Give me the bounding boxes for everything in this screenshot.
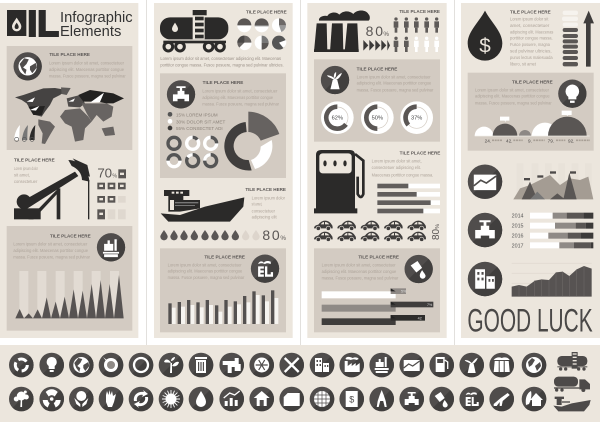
legend: 55% CONSECTET ADI [176, 126, 223, 132]
text block: Lorem ipsum dolor sit amet, consectetuer [322, 263, 396, 268]
text block: consectetuer adipiscing elit. [372, 165, 421, 170]
text block: purus lectus malesuada [510, 55, 553, 60]
chart: year bars: 2014 [512, 214, 524, 220]
text block: massa. Fusce posuere, magna sed pulvinar [49, 73, 126, 78]
text block: adipiscing elit. Maecenas [510, 29, 554, 34]
logo: OIL: IL [27, 3, 59, 44]
chart: coin stack [562, 11, 578, 66]
chart: hills: 92. [568, 138, 574, 143]
text block [49, 60, 126, 78]
title: Elements [60, 23, 121, 40]
text block [202, 89, 279, 107]
heading: TILE PLACE HERE [357, 66, 397, 71]
illustration: fuel pump [314, 150, 363, 213]
chart: cars [314, 221, 426, 241]
icon: snowflake [249, 353, 274, 377]
stat: 80%: 80 [366, 23, 383, 39]
icon: pipe [219, 353, 244, 377]
icon: plant [159, 353, 183, 377]
icon: oil rig [97, 233, 125, 261]
icon: light bulb [558, 80, 586, 108]
text block [475, 87, 552, 105]
text block: adipiscing elit. Maecenas porttitor congue [13, 248, 88, 253]
chart: year bars: 2017 [512, 243, 524, 249]
text block: Lorem ipsum dolor sit amet, consectetuer [475, 87, 549, 92]
icon: trash [189, 353, 213, 377]
text block: Lorem ipsum dolor sit amet, consectetuer [168, 262, 242, 267]
icon: earth [14, 52, 42, 80]
icon: recycle [9, 353, 34, 377]
chart: year bars: 2015 [512, 224, 524, 230]
heading: TILE PLACE HERE [400, 150, 440, 155]
legend: 30% DOLOR SIT AMET [176, 119, 225, 125]
text block: Lorem ipsum dolor sit amet, consectetuer adipiscing elit. Maecenas [160, 56, 282, 61]
icon: bars [219, 387, 244, 411]
heading: TILE PLACE HERE [358, 255, 399, 260]
stat: 70% barrels: 70 [97, 166, 112, 181]
panel: triangle chart [7, 226, 132, 331]
icon: tools [279, 353, 304, 377]
icon: house leaves [522, 387, 546, 411]
panel: ship section [160, 187, 286, 332]
text block: massa. Fusce posuere, magna sed pulvinar [322, 275, 399, 280]
icon: radiation [39, 387, 64, 411]
arrow: up [583, 11, 594, 67]
icon: flower [9, 387, 34, 411]
text block: Lorem ipsum dolor sit amet, [372, 159, 422, 164]
text block: porttitor congue massa. Fusce posuere, magna sed pulvinar ultricies. [160, 62, 284, 67]
ring: 37%: 37% [411, 116, 422, 122]
icon: fuel pump [429, 353, 454, 377]
chart: bars with flags: 42 [418, 316, 422, 320]
icon: earth [69, 353, 94, 377]
text block: massa. Fusce posuere, magna sed pulvinar [202, 102, 279, 107]
icon: oil can [429, 387, 454, 411]
icon: house [249, 387, 274, 411]
icon: bulb [39, 353, 64, 377]
icon: valve [399, 387, 424, 411]
text block: adipiscing elit. Maecenas porttitor congue [49, 67, 124, 72]
text block [160, 56, 284, 67]
stat: 80% vertical: 80% [431, 224, 442, 240]
chart: hills: 42. [506, 138, 512, 143]
heading: TILE PLACE HERE [50, 234, 91, 239]
panel: column 2 [154, 3, 293, 338]
icon: derrick [369, 387, 394, 411]
icon: hand [99, 387, 123, 411]
text block [168, 262, 245, 280]
icon: valve [167, 80, 195, 108]
icon: folder chart [468, 164, 502, 199]
chart: small donuts [168, 137, 217, 167]
illustration: pump jack [14, 158, 90, 219]
panel: column 3 lower [314, 184, 442, 332]
heading + text: pump jack: consectetuer [14, 179, 38, 184]
icon: oil rig [369, 353, 394, 377]
stat: 80%: % [383, 31, 389, 38]
chart: triangles [15, 271, 124, 318]
chart: people [394, 17, 439, 52]
text block: consectetuer [252, 208, 275, 213]
icon: sun [159, 387, 183, 411]
icon: buildings [468, 262, 502, 296]
chart: hills: 9. [528, 138, 532, 143]
icon: tree [459, 353, 484, 377]
panel: bar chart [160, 248, 286, 332]
text block: adipiscing elit. Maecenas porttitor congue [475, 94, 550, 99]
heading: TILE PLACE HERE [512, 79, 553, 84]
text block: adipiscing elit. Maecenas porttitor congue [168, 269, 243, 274]
icon: hands globe [69, 387, 94, 411]
panel: ring charts [314, 59, 440, 142]
legend [168, 112, 225, 132]
text block: massa. Fusce posuere, magna sed pulvinar [13, 254, 90, 259]
text block: adipiscing elit. Maecenas porttitor congue [322, 269, 397, 274]
icon: valve [468, 213, 502, 247]
illustration: tanker ship [161, 190, 244, 222]
icon: globe grid [310, 387, 334, 411]
heading: TILE PLACE HERE [49, 52, 90, 57]
text block [510, 17, 554, 67]
icon: factory [339, 353, 364, 377]
heading + text: pump jack: sit amet, [14, 172, 30, 177]
chart: year bars: 2016 [512, 234, 524, 240]
chart: hills [475, 111, 590, 143]
logo: OIL [7, 3, 59, 44]
icon: factory letters [459, 387, 484, 411]
panel: world map [7, 46, 132, 150]
panel: hill chart [468, 73, 594, 151]
heading + text: pump jack [14, 158, 55, 184]
panel: column 4 [461, 3, 600, 338]
illustration: tank wagon [160, 10, 228, 51]
text block: porttitor congue massa. [510, 36, 553, 41]
text block: Lorem ipsum dolor sit amet, consectetuer [49, 60, 124, 65]
icon: tank wagon [557, 352, 587, 371]
heading: TILE PLACE HERE [204, 255, 245, 260]
icon: sync [129, 387, 153, 411]
icon: can [279, 387, 304, 411]
heading: TILE PLACE HERE [246, 9, 287, 14]
chart: large donut [224, 112, 279, 171]
icon: buildings [310, 353, 334, 377]
text block: Fusce posuere, magna [510, 42, 550, 47]
icon: folder chart [399, 353, 424, 377]
ring: 62%: 62% [332, 116, 343, 122]
title [60, 9, 133, 40]
text block: massa. Fusce posuere, magna sed pulvinar [357, 87, 434, 92]
icon: barrel [339, 387, 364, 411]
text block: sit amet, [252, 202, 262, 207]
icon: ring [129, 353, 153, 377]
text block [357, 74, 434, 92]
text block: Lorem ipsum dolor sit [510, 17, 549, 22]
chart: paired bars [168, 290, 278, 324]
chart: world map [14, 87, 124, 144]
text block: amet, consectetuer [510, 23, 550, 28]
icon: gauge [99, 353, 123, 377]
icon: dollar drop: $ [479, 34, 491, 57]
stat: drops 80% [160, 227, 286, 243]
chart: six pies [237, 18, 286, 50]
legend: 15% LOREM IPSUM [176, 112, 218, 118]
text block: Lorem ipsum dolor [252, 195, 285, 200]
text block: Lorem ipsum dolor sit amet, consectetuer [202, 89, 278, 94]
chart: horizontal bars [377, 184, 440, 213]
text block [372, 159, 433, 177]
text block: Maecenas porttitor congue massa. [372, 172, 433, 177]
icon: globe pin [522, 353, 546, 377]
text block [13, 242, 90, 259]
heading: TILE PLACE HERE [399, 9, 440, 14]
title: Infographic [60, 9, 133, 26]
text block: sed pulvinar ultricies, [510, 49, 552, 54]
text block: adipiscing elit. Maecenas porttitor congue [357, 81, 432, 86]
text block: adipiscing elit. Maecenas porttitor congue [202, 95, 273, 100]
icon: pump jack [489, 387, 514, 411]
heading: TILE PLACE HERE [203, 80, 243, 85]
text block: Lorem ipsum dolor sit amet, consectetuer [357, 74, 431, 79]
heading + text: pump jack: TILE PLACE HERE [14, 158, 55, 163]
icon: dollar drop [468, 11, 502, 61]
panel: column 4 lower [467, 163, 593, 339]
stat: drops 80%: % [280, 235, 286, 242]
ring: 50%: 50% [372, 116, 383, 122]
panel: bottom icon strip [0, 345, 600, 422]
heading: TILE PLACE HERE [245, 187, 286, 192]
icon: factory letters [251, 255, 279, 283]
text block: Lorem ipsum dolor sit amet, consectetuer [13, 242, 88, 247]
chart: mountains [513, 163, 593, 199]
chart: year bars [512, 213, 593, 249]
text block: massa. Fusce posuere, magna sed pulvinar [168, 275, 245, 280]
text block: libero, sit amet [510, 62, 537, 67]
icon: drop [189, 387, 213, 411]
icon: truck [554, 377, 590, 392]
icon: barrel: $ [349, 394, 354, 404]
chart: hills: 24. [485, 138, 491, 143]
chart: bars with flags: 7% [427, 303, 433, 307]
stat: drops 80%: 80 [262, 227, 280, 243]
stat: 70% barrels: % [112, 174, 117, 180]
icon: oil can [405, 255, 433, 283]
arrows [363, 40, 390, 51]
chart: area [512, 263, 592, 297]
text block: massa. Fusce posuere, magna sed pulvinar [475, 100, 552, 105]
heading: TILE PLACE HERE [510, 10, 551, 15]
stat: 70% barrels [97, 166, 126, 219]
text block [252, 195, 285, 220]
panel: column 1 [0, 3, 138, 338]
icon: ship [553, 397, 591, 411]
text block [322, 263, 399, 280]
illustration: cooling towers [314, 10, 370, 52]
chart: bars with flags: 5% [401, 290, 407, 294]
chart: bars with flags [322, 288, 433, 325]
icon: towers [489, 353, 514, 377]
panel: flag bars [314, 248, 440, 332]
heading + text: pump jack: Lorem ipsum dolor [14, 166, 38, 171]
text block: adipiscing elit [252, 215, 277, 220]
panel: column 3 [307, 3, 447, 338]
chart: hills: 79. [548, 138, 554, 143]
panel: donut chart [160, 73, 286, 178]
icon: oil tree [321, 66, 349, 94]
